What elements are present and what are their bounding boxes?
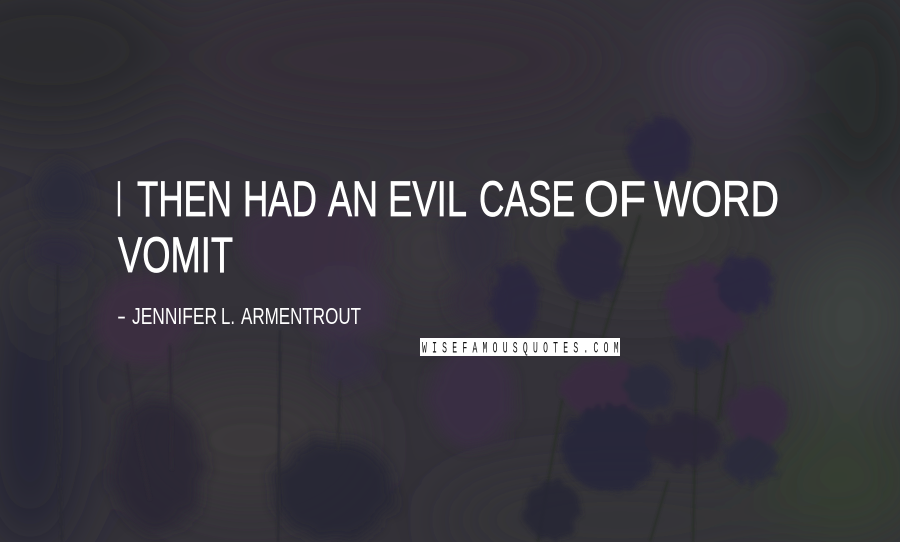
- quote line 1: OF: [584, 171, 646, 227]
- quote line 1: [116, 171, 779, 227]
- quote line 1: AN: [328, 171, 378, 227]
- quote line 2: VOMIT: [118, 227, 233, 283]
- quote line 1: CASE: [479, 171, 575, 227]
- author attribution: L.: [221, 303, 235, 329]
- author attribution: JENNIFER: [132, 303, 217, 329]
- quote text: [116, 171, 779, 283]
- author attribution: [117, 303, 361, 329]
- author attribution: -: [117, 303, 126, 329]
- quote line 1: WORD: [654, 171, 779, 227]
- quote line 1: EVIL: [388, 171, 467, 227]
- author attribution: ARMENTROUT: [241, 303, 361, 329]
- watermark badge: WISEFAMOUSQUOTES.COM: [422, 340, 619, 358]
- quote line 1: I: [116, 171, 122, 227]
- quote line 1: THEN: [137, 171, 232, 227]
- quote line 1: HAD: [243, 171, 317, 227]
